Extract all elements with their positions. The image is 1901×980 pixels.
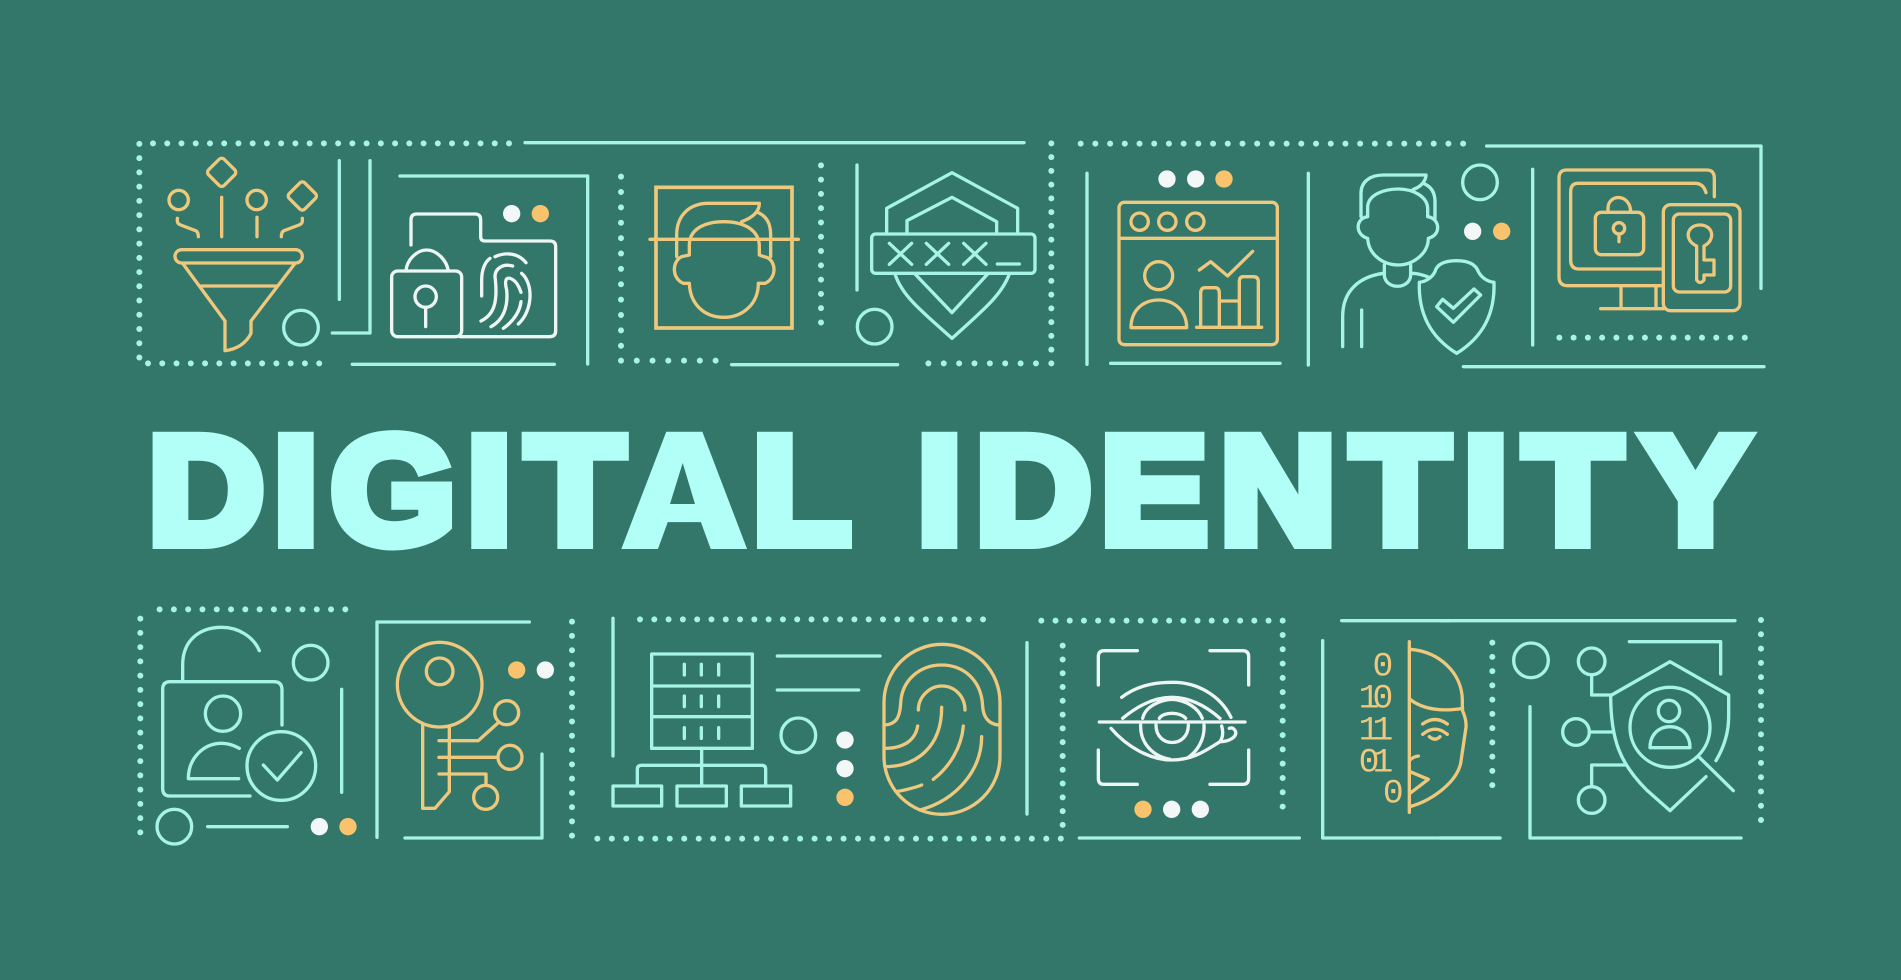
panel: bottom row, unlocked user and digital key: [140, 609, 572, 847]
panel: top row, face scan and password shield: [600, 143, 1051, 365]
panel: bottom row, eye scan and binary face: [1041, 621, 1500, 839]
icon: face scan: [650, 187, 798, 328]
icon: digital key: [397, 642, 522, 809]
panel: top row, data funnel and secure folder: [139, 143, 600, 364]
title: DIGITAL IDENTITY: [148, 405, 1749, 576]
icon: monitor with lock and key: [1559, 170, 1740, 311]
binary digits: 0: [1383, 774, 1404, 813]
panel: top row, identity dashboard and protected user: [1081, 144, 1497, 365]
icon: password shield: [872, 173, 1035, 338]
panel: bottom row, identity search shield: [1440, 620, 1761, 838]
binary digits: 1: [1359, 679, 1379, 718]
dots: one amber two white: [1134, 801, 1209, 818]
dots: status pairs: [311, 661, 554, 835]
icon: binary face: [1359, 642, 1466, 813]
icon: protected user: [1343, 175, 1494, 353]
icon: database tree: [613, 654, 791, 806]
icon: eye scan: [1098, 651, 1249, 784]
dots: white and amber: [503, 205, 549, 222]
icon: locked fingerprint folder: [392, 214, 556, 337]
binary digits: 0: [1359, 743, 1379, 782]
panel: top row, locked monitor and key: [1463, 146, 1764, 367]
dots: vertical trio: [836, 731, 854, 806]
binary digits: 0: [1373, 679, 1393, 718]
dots: two white one amber: [1158, 170, 1233, 188]
panel: bottom row, database and fingerprint: [597, 618, 1063, 839]
binary digits: 1: [1373, 712, 1393, 751]
binary digits: 0: [1373, 648, 1393, 687]
binary digits: 1: [1373, 743, 1393, 782]
icon: data funnel: [169, 157, 318, 351]
icon: search shield network: [1563, 648, 1733, 813]
icon: fingerprint: [884, 644, 1000, 814]
icon: dashboard window: [1119, 202, 1277, 345]
icon: unlocked user padlock: [163, 627, 316, 800]
binary digits: 1: [1359, 712, 1379, 751]
